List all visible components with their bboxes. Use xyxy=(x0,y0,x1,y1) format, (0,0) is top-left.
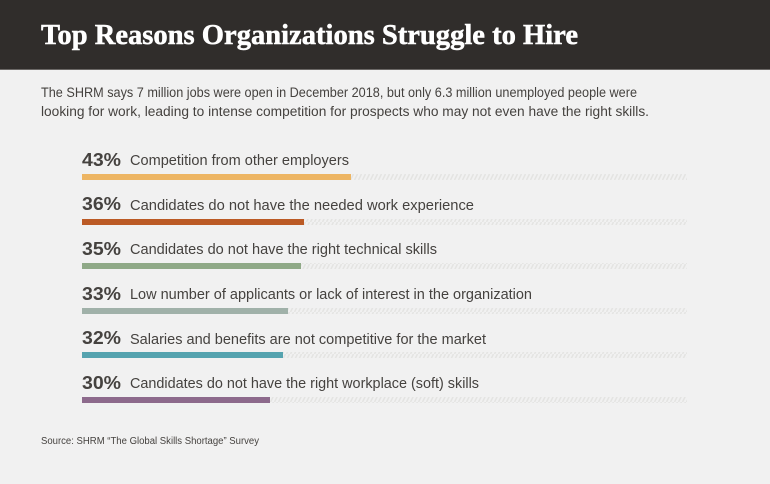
row: 33% xyxy=(82,283,687,314)
row: 30%: 30% xyxy=(82,372,121,393)
row: 36% xyxy=(82,193,687,225)
row: 35% xyxy=(82,238,687,269)
intro paragraph xyxy=(41,85,649,119)
intro paragraph: The SHRM says 7 million jobs were open in December 2018, but only 6.3 million unemployed people were xyxy=(41,85,637,100)
row: 32% xyxy=(82,327,687,358)
title: Top Reasons Organizations Struggle to Hire xyxy=(41,20,578,51)
row: 32%: Salaries and benefits are not competitive for the market xyxy=(130,332,486,348)
source note: Source: SHRM “The Global Skills Shortage” Survey xyxy=(41,436,259,447)
row: 35%: 35% xyxy=(82,238,121,259)
row: 43%: 43% xyxy=(82,149,121,170)
row: 36%: Candidates do not have the needed work experience xyxy=(130,198,474,214)
row: 30%: Candidates do not have the right workplace (soft) skills xyxy=(130,376,479,392)
intro paragraph: looking for work, leading to intense competition for prospects who may not even have the right skills. xyxy=(41,104,649,119)
header banner xyxy=(0,0,770,70)
row: 36%: 36% xyxy=(82,193,121,214)
row: 33%: 33% xyxy=(82,283,121,304)
row: 43% xyxy=(82,149,687,180)
row: 32%: 32% xyxy=(82,327,121,348)
bar chart xyxy=(82,149,687,403)
row: 43%: Competition from other employers xyxy=(130,153,349,169)
row: 30% xyxy=(82,372,687,403)
row: 33%: Low number of applicants or lack of interest in the organization xyxy=(130,287,532,303)
row: 35%: Candidates do not have the right technical skills xyxy=(130,242,437,258)
